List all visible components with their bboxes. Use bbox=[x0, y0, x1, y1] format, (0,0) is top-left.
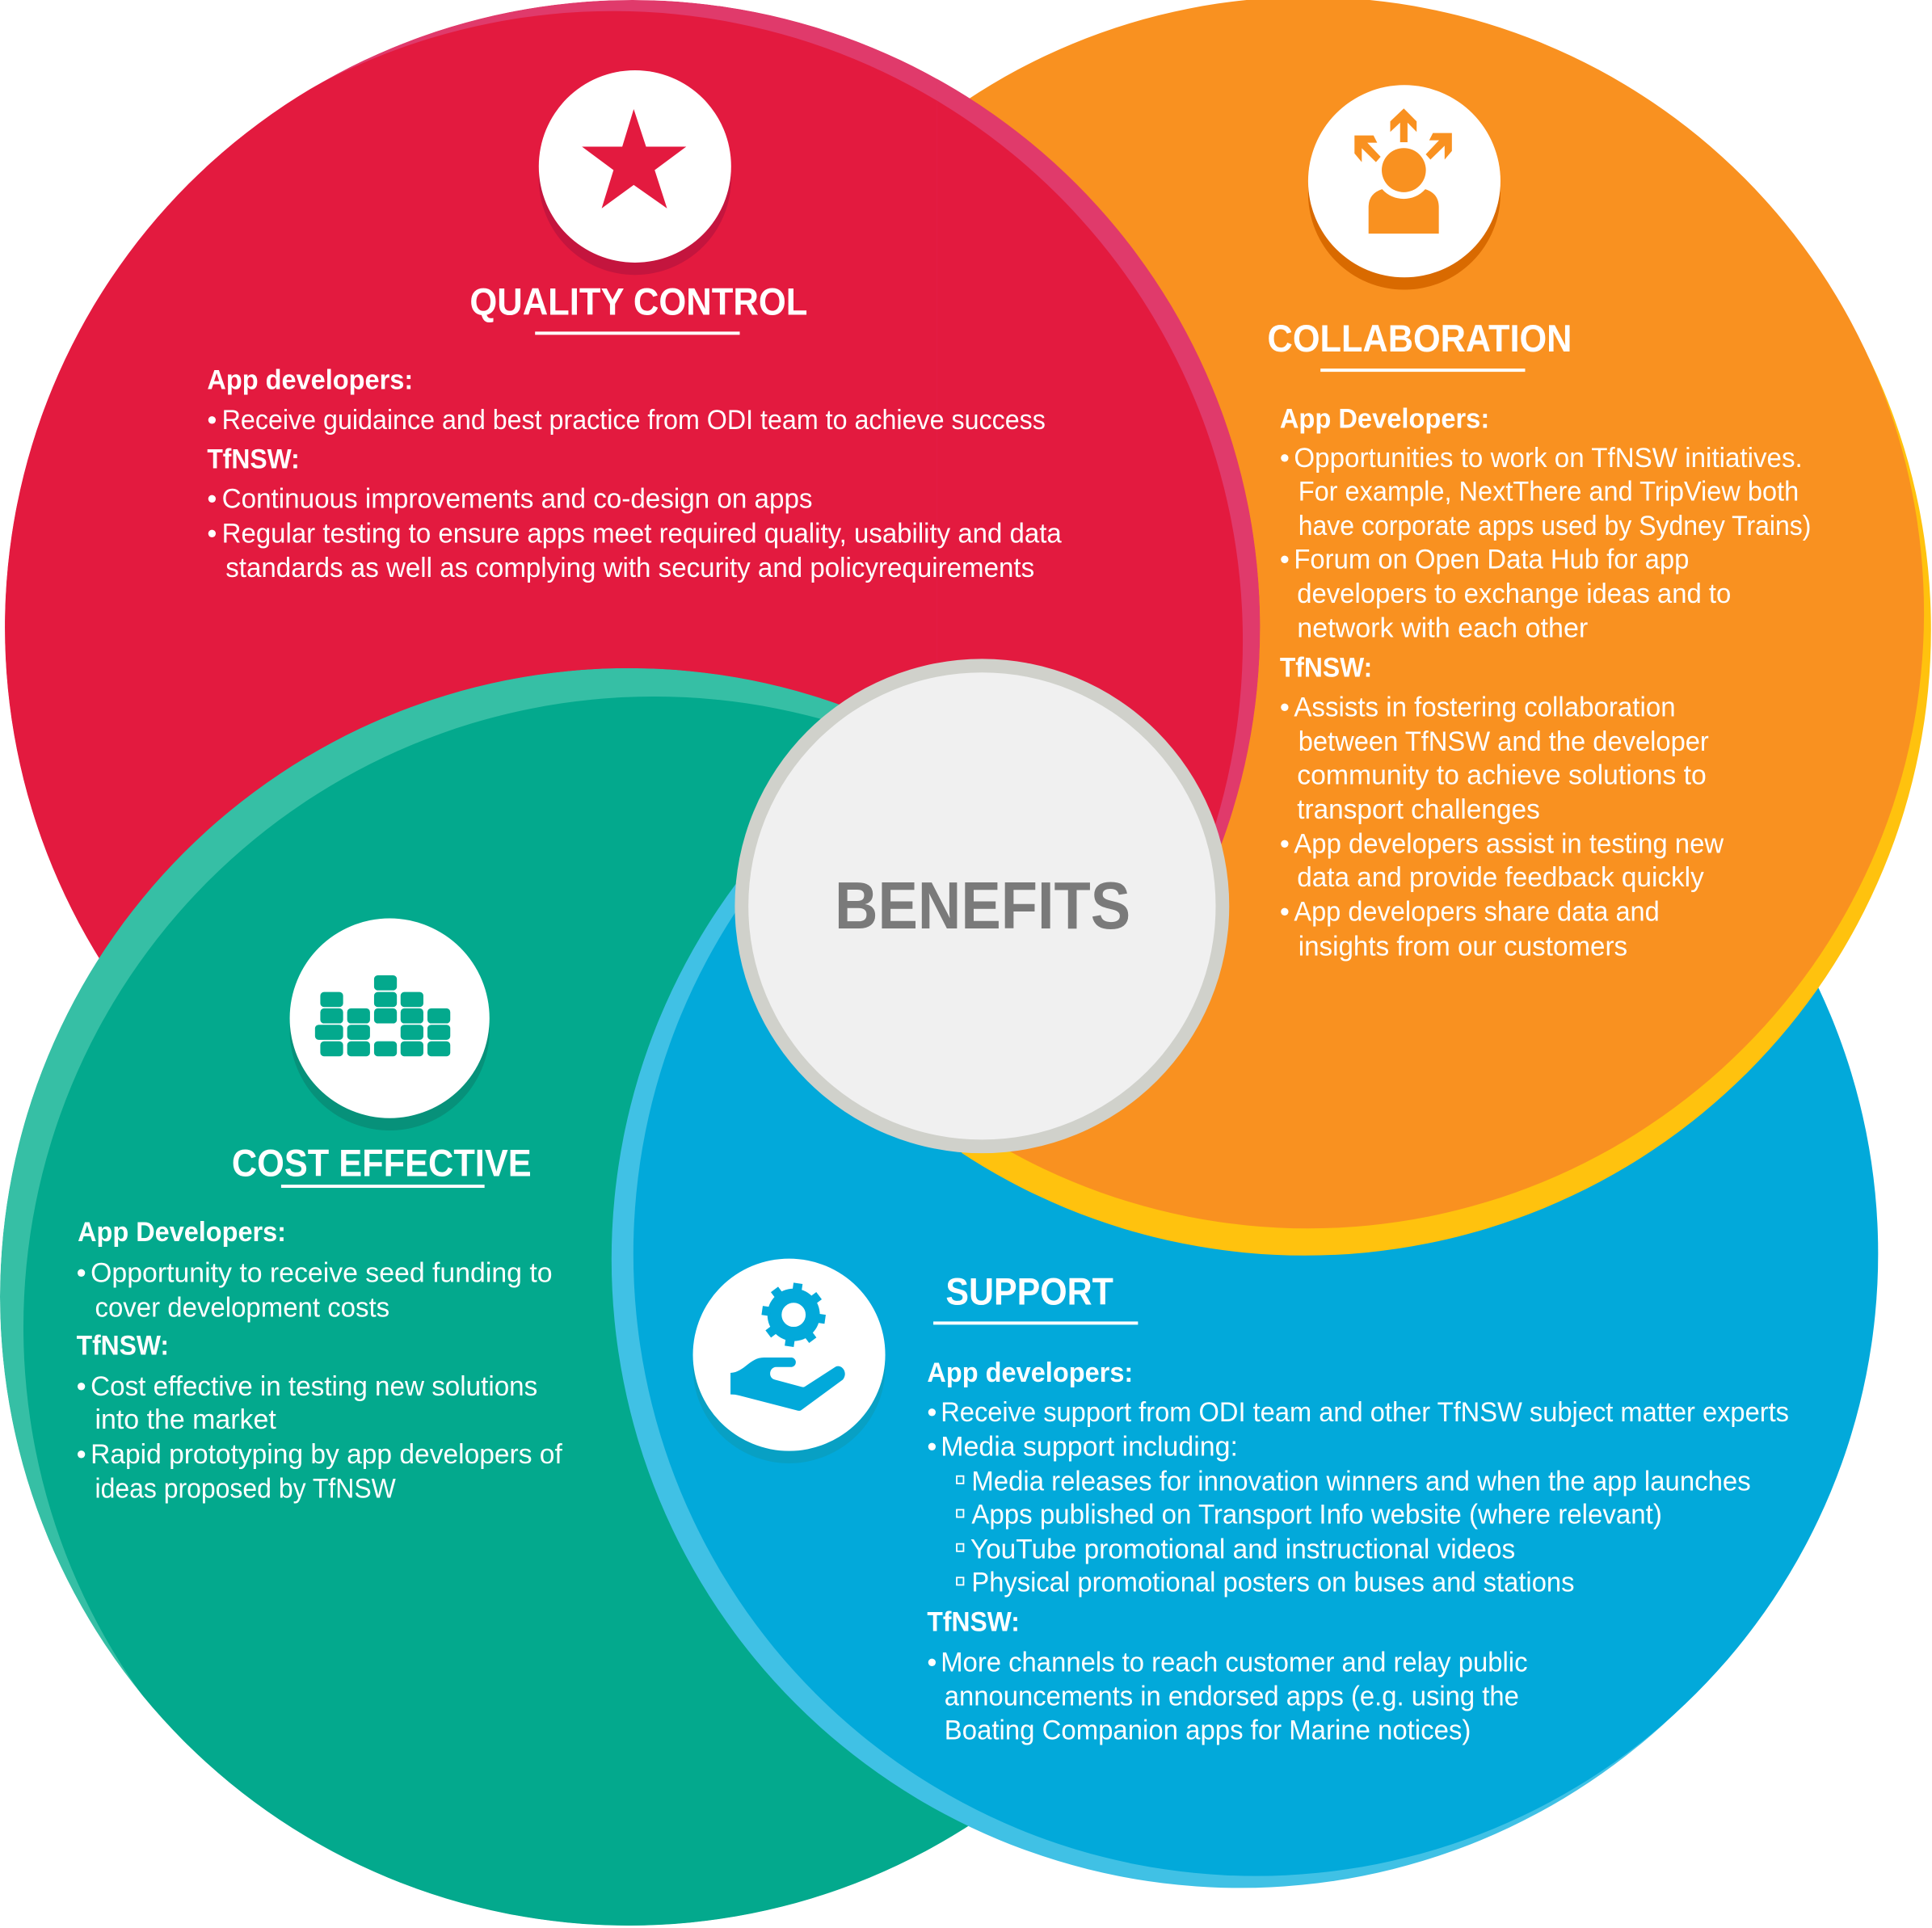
text: collaboration details: developers to exchange ideas and to bbox=[1297, 579, 1731, 609]
text: collaboration details: community to achieve solutions to bbox=[1297, 760, 1707, 790]
text: collaboration details: App developers share data and bbox=[1294, 897, 1660, 928]
text: quality control details: Regular testing to ensure apps meet required quality, usability and data bbox=[222, 518, 1063, 549]
text: support details: Receive support from ODI team and other TfNSW subject matter experts bbox=[941, 1397, 1789, 1428]
circle: cost effective (green) bbox=[0, 667, 968, 1926]
text: support details: Apps published on Transport Info website (where relevant) bbox=[971, 1500, 1662, 1530]
text: quality control details: Receive guidaince and best practice from ODI team to achieve success bbox=[222, 405, 1046, 436]
icon: person with arrows bbox=[1308, 85, 1501, 290]
text: quality control details bbox=[207, 364, 1063, 583]
text: collaboration details: insights from our customers bbox=[1299, 931, 1627, 962]
text: support details: Media releases for innovation winners and when the app launches bbox=[971, 1466, 1751, 1497]
text: collaboration details: transport challenges bbox=[1297, 794, 1540, 825]
heading: collaboration: COLLABORATION bbox=[1268, 318, 1572, 360]
text: support details: App developers: bbox=[927, 1358, 1133, 1388]
text: collaboration details: have corporate apps used by Sydney Trains) bbox=[1299, 511, 1811, 541]
panel: collaboration bbox=[1268, 85, 1811, 962]
text: collaboration details: For example, NextThere and TripView both bbox=[1299, 476, 1799, 507]
circle: support (blue) bbox=[612, 630, 1878, 1888]
text: collaboration details: App developers assist in testing new bbox=[1294, 829, 1724, 860]
text: quality control details: • bbox=[207, 518, 217, 549]
text: quality control details: standards as well as complying with security and policyrequirements bbox=[225, 553, 1034, 583]
text: support details bbox=[927, 1358, 1789, 1746]
text: cost effective details: • bbox=[77, 1439, 86, 1470]
text: cost effective details bbox=[77, 1217, 562, 1505]
text: support details: Physical promotional posters on buses and stations bbox=[971, 1568, 1575, 1598]
text: cost effective details: ideas proposed by TfNSW bbox=[95, 1474, 396, 1505]
heading: cost effective: COST EFFECTIVE bbox=[232, 1143, 532, 1185]
panel: support bbox=[693, 1259, 1789, 1746]
text: collaboration details bbox=[1280, 403, 1811, 962]
text: quality control details: App developers: bbox=[207, 364, 413, 395]
text: cost effective details: • bbox=[77, 1371, 86, 1402]
text: collaboration details: TfNSW: bbox=[1280, 653, 1372, 684]
text: cost effective details: into the market bbox=[95, 1404, 276, 1435]
text: support details: More channels to reach customer and relay public bbox=[941, 1648, 1528, 1678]
text: support details: TfNSW: bbox=[927, 1606, 1020, 1637]
text: support details: YouTube promotional and instructional videos bbox=[970, 1534, 1515, 1564]
text: cost effective details: • bbox=[77, 1258, 86, 1289]
circle: red sliver above orange bbox=[937, 79, 1261, 844]
text: collaboration details: data and provide feedback quickly bbox=[1297, 862, 1705, 893]
heading: support: SUPPORT bbox=[945, 1270, 1113, 1313]
center circle: benefits: BENEFITS bbox=[835, 869, 1130, 943]
text: collaboration details: Assists in fostering collaboration bbox=[1294, 692, 1676, 722]
circle: quality control (red) bbox=[5, 0, 970, 958]
text: quality control details: • bbox=[207, 484, 217, 515]
icon: hand with gear bbox=[693, 1259, 886, 1463]
text: cost effective details: Rapid prototyping by app developers of bbox=[90, 1439, 562, 1470]
text: collaboration details: • bbox=[1280, 544, 1290, 575]
icon: star bbox=[539, 70, 731, 275]
text: quality control details: Continuous improvements and co-design on apps bbox=[222, 484, 813, 515]
text: collaboration details: Opportunities to work on TfNSW initiatives. bbox=[1294, 443, 1803, 474]
text: cost effective details: App Developers: bbox=[78, 1217, 286, 1248]
text: support details: announcements in endorsed apps (e.g. using the bbox=[945, 1681, 1519, 1711]
text: support details: Boating Companion apps for Marine notices) bbox=[945, 1715, 1471, 1746]
text: collaboration details: • bbox=[1280, 443, 1290, 474]
text: quality control details: • bbox=[207, 405, 217, 436]
icon: blocks bbox=[290, 919, 490, 1130]
text: collaboration details: • bbox=[1280, 829, 1290, 860]
text: cost effective details: TfNSW: bbox=[77, 1331, 169, 1362]
text: support details: • bbox=[927, 1432, 937, 1463]
text: collaboration details: between TfNSW and the developer bbox=[1299, 726, 1709, 757]
text: quality control details: TfNSW: bbox=[207, 444, 300, 475]
text: collaboration details: network with each other bbox=[1297, 613, 1588, 644]
text: support details: • bbox=[927, 1648, 937, 1678]
heading: quality control: QUALITY CONTROL bbox=[469, 280, 807, 323]
text: collaboration details: • bbox=[1280, 692, 1290, 722]
center circle: benefits bbox=[734, 659, 1229, 1153]
panel: quality control bbox=[207, 70, 1063, 583]
text: cost effective details: Opportunity to receive seed funding to bbox=[90, 1258, 553, 1289]
text: collaboration details: Forum on Open Data Hub for app bbox=[1294, 544, 1689, 575]
text: cost effective details: cover development costs bbox=[95, 1292, 389, 1323]
panel: cost effective bbox=[77, 919, 562, 1505]
circle: collaboration (orange) bbox=[962, 0, 1931, 1256]
text: collaboration details: App Developers: bbox=[1280, 403, 1489, 434]
text: support details: Media support including: bbox=[941, 1432, 1238, 1463]
text: support details: • bbox=[927, 1397, 937, 1428]
text: cost effective details: Cost effective in testing new solutions bbox=[90, 1371, 537, 1402]
text: collaboration details: • bbox=[1280, 897, 1290, 928]
